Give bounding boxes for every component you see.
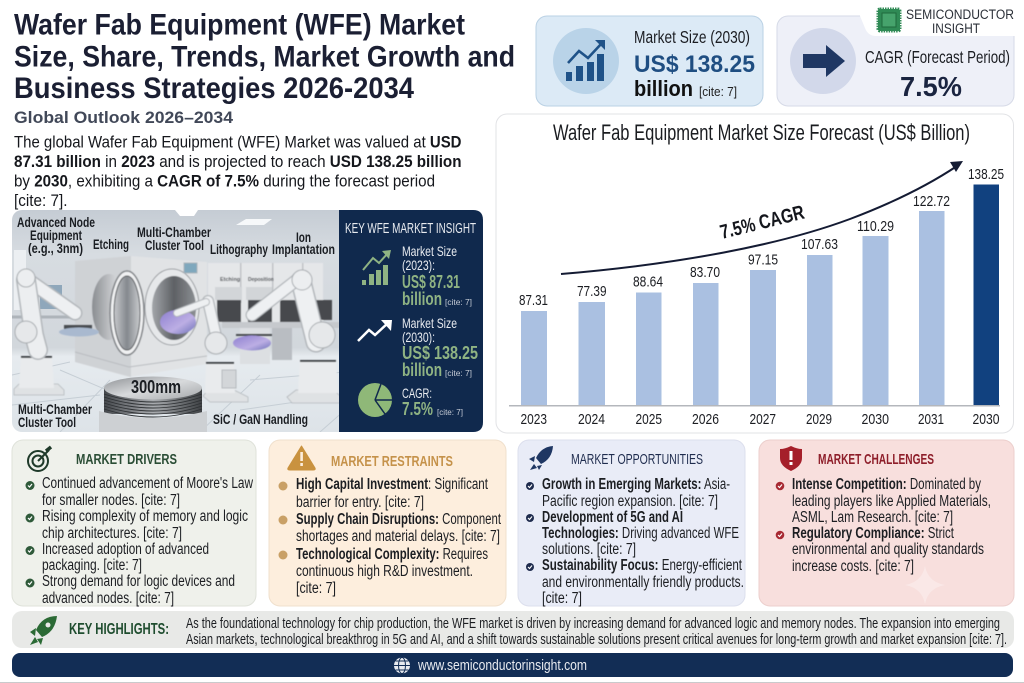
text: challenges [792, 476, 991, 575]
stat: 2023: US$ 87.31 [402, 272, 460, 292]
website: www.semiconductorinsight.com [417, 658, 587, 674]
photo callouts: Cluster Tool [145, 238, 204, 253]
panel: market challenges [759, 440, 1014, 606]
right robot arm [233, 270, 340, 403]
photo callouts: Equipment [30, 228, 82, 243]
text: challenges: increase costs. [cite: 7] [792, 558, 914, 575]
photo callouts: (e.g., 3nm) [28, 241, 83, 256]
text: drivers: for smaller nodes. [cite: 7] [42, 492, 180, 509]
heading: drivers: MARKET DRIVERS [76, 451, 177, 468]
bar chart: 2029 [806, 411, 832, 428]
bar chart [509, 166, 1004, 428]
intro paragraph: 87.31 billion in 2023 and is projected to reach USD 138.25 billion [14, 152, 462, 171]
heading: restraints: MARKET RESTRAINTS [331, 453, 453, 470]
logo wordmark [906, 7, 1014, 36]
bar chart: 97.15 [748, 252, 778, 268]
icon: green rocket [30, 616, 57, 645]
bar chart: 2031 [918, 411, 944, 428]
value: US$ 138.25 [634, 51, 755, 78]
left robot arm [14, 269, 99, 395]
logo wordmark: SEMICONDUCTOR [906, 7, 1014, 22]
text: drivers: chip architectures. [cite: 7] [42, 525, 182, 542]
photo callouts [17, 215, 335, 430]
back equipment: Deposition [248, 277, 274, 283]
text: drivers: Rising complexity of memory and logic [42, 508, 248, 525]
label: market size: Market Size (2030) [634, 27, 750, 47]
photo callouts: Implantation [272, 242, 335, 257]
heading: key highlights: KEY HIGHLIGHTS: [69, 621, 169, 638]
bar chart: 2027 [750, 411, 776, 428]
text: challenges: ASML, Lam Research. [cite: 7] [792, 509, 953, 526]
text: restraints: barrier for entry. [cite: 7] [296, 494, 424, 511]
text: opportunities: Technologies: Driving advanced WFE [542, 525, 739, 542]
growth arrow [561, 161, 963, 274]
panel: chart [496, 114, 1014, 433]
icon: warning [288, 446, 315, 470]
process chamber machine [75, 256, 207, 377]
stat: cagr: CAGR: [402, 385, 432, 401]
stat: 2023: (2023): [402, 257, 435, 273]
text: opportunities: [cite: 7] [542, 590, 582, 607]
photo callouts: 300mm [131, 377, 181, 397]
text: opportunities: and environmentally friendly products. [542, 574, 744, 591]
stat: cagr: [cite: 7] [437, 407, 463, 417]
stat: 2023 [402, 243, 472, 309]
stat: 2030: US$ 138.25 [402, 343, 478, 363]
panel: key highlights [12, 611, 1014, 648]
icon: white arrow [358, 320, 392, 341]
stat: cagr [402, 385, 463, 419]
card: market size 2030 [536, 16, 763, 106]
title: Wafer Fab Equipment (WFE) Market [14, 8, 465, 42]
bullets: drivers [26, 481, 34, 588]
text: challenges: Regulatory Compliance: Strict [792, 525, 955, 542]
insight heading: KEY WFE MARKET INSIGHT [345, 220, 476, 237]
unit: billion [634, 76, 693, 101]
icon: globe [394, 658, 410, 674]
intro paragraph: [cite: 7]. [14, 191, 68, 210]
text: restraints [296, 476, 501, 597]
icon: shield [780, 446, 802, 471]
cagr label: 7.5% CAGR [718, 202, 807, 244]
icon: rocket [529, 446, 553, 470]
intro paragraph: by 2030, exhibiting a CAGR of 7.5% during the forecast period [14, 172, 435, 190]
stat: 2030: Market Size [402, 315, 457, 331]
citation: [cite: 7] [699, 84, 737, 99]
bullets: challenges [776, 482, 784, 539]
bar chart: 2030 [972, 411, 1000, 428]
title [14, 8, 515, 105]
text: opportunities: Sustainability Focus: Energy-efficient [542, 557, 743, 574]
heading: opportunities: MARKET OPPORTUNITIES [571, 451, 703, 468]
card: cagr [777, 16, 1014, 106]
text: drivers: Continued advancement of Moore's Law [42, 475, 254, 492]
back equipment: Etching [220, 277, 240, 283]
panel: market opportunities [518, 440, 745, 607]
text: restraints: High Capital Investment: Significant [296, 476, 489, 493]
text: drivers: packaging. [cite: 7] [42, 557, 142, 574]
bar chart: 2026 [692, 411, 719, 428]
text: challenges: Intense Competition: Dominated by [792, 476, 981, 493]
text: restraints: continuous high R&D investment. [296, 563, 473, 580]
bar chart: 138.25 [968, 166, 1004, 183]
icon: pie chart [358, 383, 392, 417]
stat: 2030: (2030): [402, 329, 435, 345]
value: cagr: 7.5% [900, 71, 962, 102]
bar chart: 2025 [636, 411, 662, 428]
text: restraints: [cite: 7] [296, 580, 336, 597]
text: restraints: Technological Complexity: Requires [296, 546, 488, 563]
text: drivers [42, 475, 254, 607]
title: Business Strategies 2026-2034 [14, 72, 414, 105]
photo callouts: Lithography [210, 242, 268, 257]
logo [860, 0, 1024, 36]
text: restraints: shortages and material delays. [cite: 7] [296, 528, 500, 545]
icon: arrow [790, 28, 856, 94]
bar chart: 2023 [520, 411, 547, 428]
intro paragraph: The global Wafer Fab Equipment (WFE) Market was valued at USD [14, 132, 462, 152]
text: drivers: advanced nodes. [cite: 7] [42, 590, 174, 607]
middle robot arm [177, 301, 248, 402]
bar chart: 88.64 [633, 274, 663, 290]
panel: market restraints [269, 440, 506, 606]
bar chart: 87.31 [519, 292, 548, 309]
photo callouts: Advanced Node [17, 215, 95, 230]
bar chart: 77.39 [577, 283, 606, 300]
back equipment [208, 263, 340, 364]
icon: chip [878, 9, 900, 31]
text: opportunities: Growth in Emerging Markets: Asia- [542, 476, 730, 493]
photo callouts: Cluster Tool [18, 415, 76, 430]
photo callouts: Multi-Chamber [18, 402, 93, 417]
bar chart: 2030 [862, 411, 889, 428]
bar chart: 122.72 [913, 193, 950, 210]
photo callouts: Etching [93, 237, 129, 252]
stat: 2030 [402, 315, 478, 380]
wafer stack [99, 376, 207, 432]
bar chart: 83.70 [690, 264, 720, 281]
text: opportunities: Pacific region expansion. [cite: 7] [542, 493, 718, 510]
title: Size, Share, Trends, Market Growth and [14, 40, 515, 74]
photo callouts: Multi-Chamber [137, 225, 212, 240]
bullets: restraints [278, 482, 288, 560]
stat: 2030: [cite: 7] [445, 368, 472, 378]
photo callouts: Ion [296, 230, 311, 245]
stat: 2023: Market Size [402, 243, 457, 259]
panel: market drivers [12, 440, 256, 607]
panel: cleanroom photo [12, 210, 352, 432]
ceiling light [12, 210, 272, 317]
icon: target [28, 447, 51, 471]
logo wordmark: INSIGHT [932, 21, 980, 36]
photo callouts: SiC / GaN Handling [213, 412, 308, 427]
bullets: opportunities [526, 482, 534, 571]
stat: 2030: billion [402, 360, 442, 380]
subtitle: Global Outlook 2026–2034 [14, 108, 234, 127]
text: opportunities: Development of 5G and AI [542, 509, 683, 526]
stat: 2023: billion [402, 289, 442, 309]
bar chart: 107.63 [801, 236, 838, 253]
stat: cagr: 7.5% [402, 399, 433, 419]
stat: 2023: [cite: 7] [445, 297, 472, 307]
text: key highlights [186, 615, 1007, 648]
icon: growth chart [553, 28, 619, 94]
floor tiles [12, 362, 345, 432]
footer bar [12, 653, 1013, 677]
text: restraints: Supply Chain Disruptions: Component [296, 511, 501, 528]
heading: challenges: MARKET CHALLENGES [818, 451, 934, 468]
icon: green chart [362, 250, 391, 285]
text: drivers: Increased adoption of advanced [42, 541, 209, 558]
text: drivers: Strong demand for logic devices and [42, 573, 235, 590]
bar chart: 2024 [578, 411, 605, 428]
panel: key insight [339, 210, 483, 432]
text: opportunities: solutions. [cite: 7] [542, 541, 636, 558]
text: opportunities [542, 476, 744, 607]
bar chart: 110.29 [857, 218, 894, 235]
sparkle [905, 566, 945, 604]
intro paragraph [14, 132, 462, 210]
